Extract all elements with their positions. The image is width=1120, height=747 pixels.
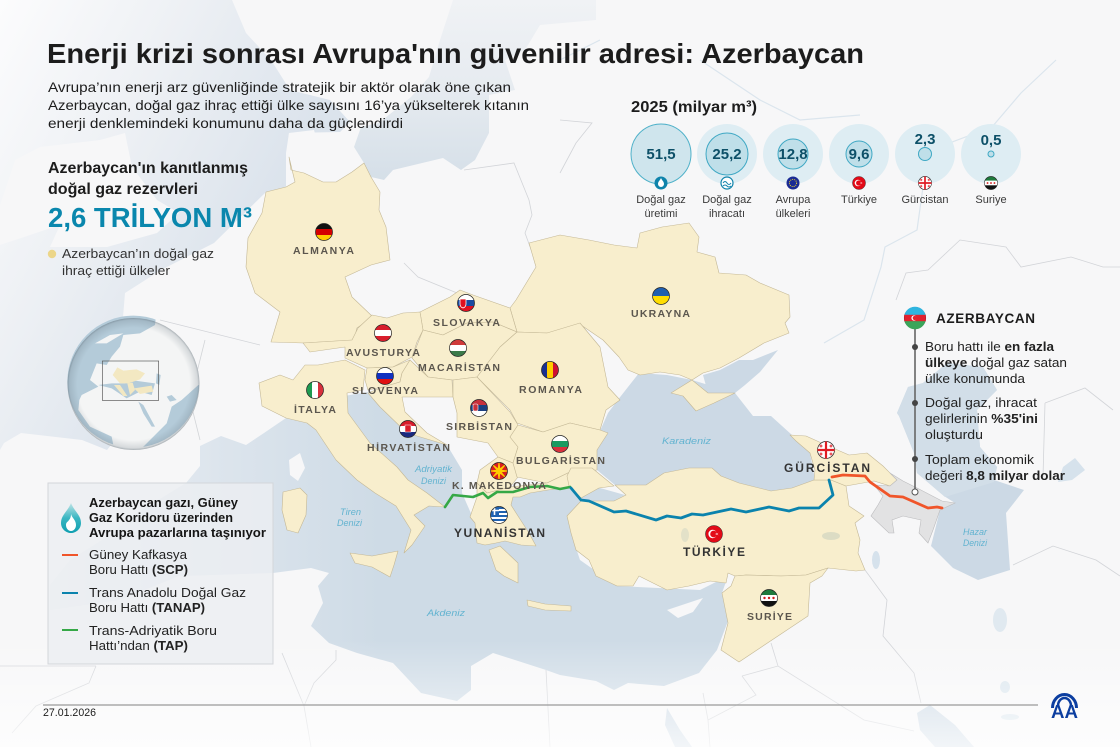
country: Slovakya [433, 294, 500, 329]
title: Enerji krizi sonrası Avrupa'nın güvenilir adresi: Azerbaycan [47, 38, 864, 69]
country: Türkiye: TÜRKİYE [683, 544, 745, 559]
reserves heading [48, 160, 248, 198]
country: Sırbistan: SIRBİSTAN [446, 420, 512, 433]
intro text: Avrupa’nın enerji arz güvenliğinde stratejik bir aktör olarak öne çıkan [48, 79, 511, 95]
exporter countries: Kuzey Makedonya [477, 457, 518, 493]
bubble: Avrupa ülkeleri: ülkeleri [776, 208, 810, 220]
map legend: exporter countries: ihraç ettiği ülkeler [62, 263, 171, 278]
country: Gürcistan: GÜRCİSTAN [784, 460, 870, 475]
exporter countries: Ukrayna [510, 223, 790, 411]
sea label: Adriyatik Denizi [414, 464, 453, 486]
icon: gas flame [61, 503, 81, 533]
legend heading: Azerbaycan gazı, Güney [89, 496, 238, 510]
exporter countries: Slovakya [420, 290, 517, 335]
bubble: Doğal gaz ihracatı: Doğal gaz [702, 194, 752, 206]
exporter countries: Slovenya [365, 360, 410, 390]
country: Almanya [293, 223, 354, 257]
footer rule and date: 27.01.2026 [43, 707, 96, 719]
exporter countries: Suriye [721, 568, 828, 662]
country: Slovenya: SLOVENYA [352, 385, 418, 397]
legend heading: Avrupa pazarlarına taşınıyor [89, 526, 266, 540]
sea label: Karadeniz: Karadeniz [662, 436, 712, 446]
Azerbaycan callout: oluşturdu [925, 428, 983, 442]
Azerbaycan grey territory [871, 473, 955, 543]
Azerbaycan callout [904, 307, 1067, 495]
country: Romanya: ROMANYA [519, 384, 582, 396]
Azerbaycan callout: AZERBAYCAN [936, 311, 1035, 326]
bubble: Türkiye: 9,6 [849, 146, 869, 163]
bubble: Suriye [961, 124, 1021, 206]
bubble: Doğal gaz ihracatı [697, 124, 757, 220]
bubble: Türkiye: Türkiye [841, 194, 877, 206]
sea label: Adriyatik Denizi: Denizi [421, 476, 447, 486]
country: Almanya: ALMANYA [293, 245, 354, 257]
pipeline: SCP (orange) [832, 475, 942, 508]
bubble: Doğal gaz ihracatı: 25,2 [712, 146, 742, 163]
sea label: Hazar Denizi: Denizi [963, 538, 988, 548]
sea label: Hazar Denizi: Hazar [963, 527, 988, 537]
exporter countries: Yunanistan [470, 472, 571, 611]
country: Avusturya [346, 324, 420, 359]
exporter countries: Macaristan [412, 322, 517, 380]
bubble: Türkiye [829, 124, 889, 206]
bubble: Gürcistan: Gürcistan [901, 194, 949, 206]
country: Slovakya: SLOVAKYA [433, 317, 500, 329]
country: Hırvatistan [367, 420, 450, 454]
bubble: Suriye: Suriye [975, 194, 1007, 206]
bubble: Suriye: 0,5 [981, 132, 1001, 149]
sea label: Tiren Denizi: Tiren [340, 507, 361, 517]
reserves value: 2,6 TRİLYON M³ [48, 202, 252, 233]
AA logo: AA [1051, 702, 1078, 722]
Azerbaycan callout: değeri 8,8 milyar dolar [925, 469, 1065, 483]
country: Ukrayna: UKRAYNA [631, 308, 690, 320]
exporter countries: Sırbistan [453, 377, 518, 463]
country: Türkiye [683, 526, 745, 559]
exporter countries: Gürcistan [790, 435, 897, 486]
legend item: TANAP: Trans Anadolu Doğal Gaz [89, 586, 246, 600]
sea label: Akdeniz: Akdeniz [426, 608, 466, 618]
country: Ukrayna [631, 287, 690, 320]
intro text: Azerbaycan, doğal gaz ihraç ettiği ülke sayısını 16’ya yükselterek kıtanın [48, 97, 529, 113]
country: Suriye [747, 589, 792, 623]
legend heading: Gaz Koridoru üzerinden [89, 511, 233, 525]
exporter countries: Sardinya ve Sicilya [282, 488, 398, 577]
pipeline: TANAP (blue) [571, 480, 833, 520]
pipeline: TAP (green) [445, 486, 570, 507]
exporter countries: Hırvatistan [368, 360, 453, 445]
country: Kuzey Makedonya [452, 462, 546, 492]
legend heading [89, 496, 266, 540]
stats heading: 2025 (milyar m³) [631, 99, 757, 116]
sea label: Adriyatik Denizi: Adriyatik [414, 464, 453, 474]
bubble: Doğal gaz üretimi: üretimi [644, 208, 678, 220]
bubble: Doğal gaz üretimi [631, 124, 691, 220]
legend item: TAP: Trans-Adriyatik Boru [89, 624, 217, 638]
bubble: Doğal gaz ihracatı: ihracatı [709, 208, 745, 220]
map legend: exporter countries [48, 246, 214, 278]
exporter countries: İtalya [259, 360, 445, 553]
map legend: exporter countries: Azerbaycan’ın doğal gaz [62, 246, 214, 261]
bubble: Doğal gaz üretimi: Doğal gaz [636, 194, 686, 206]
country: Avusturya: AVUSTURYA [346, 347, 420, 359]
intro text: enerji denklemindeki konumunu daha da güçlendirdi [48, 115, 403, 131]
legend item: TAP: Hattı’ndan (TAP) [89, 639, 188, 653]
intro text [48, 79, 529, 131]
country: İtalya: İTALYA [294, 403, 336, 416]
country: İtalya [294, 381, 336, 416]
country: Hırvatistan: HİRVATİSTAN [367, 441, 450, 454]
legend item: SCP: Güney Kafkasya [89, 548, 187, 562]
country: Macaristan: MACARİSTAN [418, 361, 500, 374]
country: Macaristan [418, 339, 500, 374]
sea label: Tiren Denizi [337, 507, 363, 528]
country: Gürcistan [784, 442, 870, 475]
exporter countries: Romanya [477, 323, 620, 432]
country: Romanya [519, 361, 582, 396]
country: Kuzey Makedonya: K. MAKEDONYA [452, 480, 546, 492]
exporter countries: Almanya [246, 157, 390, 343]
Azerbaycan callout: Doğal gaz, ihracat [925, 396, 1038, 410]
reserves heading: doğal gaz rezervleri [48, 181, 198, 198]
country: Bulgaristan: BULGARİSTAN [516, 454, 605, 467]
bubble: Gürcistan [895, 124, 955, 206]
bubble: Doğal gaz üretimi: 51,5 [646, 146, 676, 163]
country: Sırbistan [446, 399, 512, 433]
bubble: Avrupa ülkeleri [763, 124, 823, 220]
exporter countries: Avusturya [303, 312, 423, 368]
country: Suriye: SURİYE [747, 610, 792, 623]
Azerbaycan callout: ülke konumunda [925, 372, 1025, 386]
reserves heading: Azerbaycan'ın kanıtlanmış [48, 160, 248, 177]
bubble: Avrupa ülkeleri: Avrupa [776, 194, 811, 206]
legend panel: pipelines [48, 483, 273, 664]
exporter countries: Bulgaristan [510, 423, 608, 483]
legend item: SCP [62, 548, 188, 577]
sea label: Tiren Denizi: Denizi [337, 518, 363, 528]
Azerbaycan callout: Toplam ekonomik [925, 453, 1035, 467]
legend item: TANAP: Boru Hattı (TANAP) [89, 601, 205, 615]
country: Slovenya [352, 367, 418, 397]
country: Bulgaristan [516, 435, 605, 467]
country: Yunanistan: YUNANİSTAN [454, 525, 545, 540]
Azerbaycan callout: gelirlerinin %35'ini [925, 412, 1038, 426]
bubble: Gürcistan: 2,3 [915, 131, 935, 148]
legend item: TANAP [62, 586, 246, 615]
Azerbaycan callout: ülkeye doğal gaz satan [925, 356, 1067, 370]
exporter countries: Türkiye [567, 468, 865, 590]
legend item: TAP [62, 624, 217, 653]
locator globe [67, 316, 200, 450]
sea label: Hazar Denizi [963, 527, 988, 548]
Azerbaycan callout: Boru hattı ile en fazla [925, 340, 1055, 354]
bubble: Avrupa ülkeleri: 12,8 [778, 146, 808, 163]
legend item: SCP: Boru Hattı (SCP) [89, 563, 188, 577]
country: Yunanistan [454, 506, 545, 540]
